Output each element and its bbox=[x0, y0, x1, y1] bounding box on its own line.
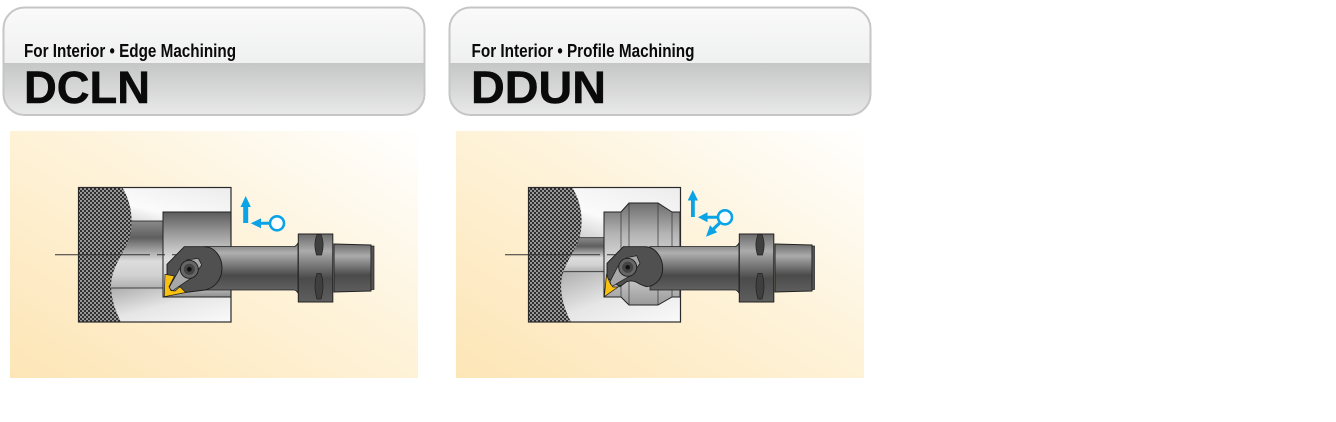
diagram: DCLN boring tool in workpiece bbox=[55, 187, 374, 322]
flange slot lower bbox=[315, 274, 323, 299]
groove lines bbox=[621, 203, 672, 305]
icon: feed direction arrows bbox=[688, 190, 732, 237]
workpiece outline bbox=[78, 188, 231, 322]
header: DDUN bbox=[450, 8, 870, 115]
center line bbox=[55, 254, 178, 256]
lower cavity bbox=[550, 271, 681, 322]
profile groove bbox=[604, 203, 680, 305]
subtitle: For Interior Edge Machining: For Interior • Edge Machining bbox=[24, 41, 236, 61]
taper shank bbox=[334, 244, 371, 292]
clamp bbox=[169, 258, 202, 291]
flange bbox=[739, 234, 774, 302]
workpiece bbox=[78, 187, 132, 322]
diagram: DDUN boring tool in workpiece bbox=[505, 187, 814, 322]
flange slot upper bbox=[756, 234, 764, 255]
carbide insert bbox=[164, 274, 186, 297]
tool head bbox=[607, 247, 663, 287]
flange slot upper bbox=[315, 234, 323, 255]
shank end bbox=[812, 246, 814, 290]
bore bbox=[110, 221, 166, 288]
model name: DCLN: DCLN bbox=[24, 62, 150, 113]
clamp bbox=[610, 256, 640, 287]
screw bbox=[619, 258, 637, 276]
tool shank bar bbox=[205, 243, 298, 293]
shank end bbox=[371, 246, 374, 290]
background panel: DCLN diagram bbox=[10, 131, 418, 378]
flange slot lower bbox=[756, 274, 764, 299]
flange bbox=[298, 234, 333, 302]
screw bbox=[180, 260, 198, 278]
workpiece outline bbox=[528, 188, 680, 322]
upper cavity bbox=[78, 187, 231, 227]
sleeve bore bbox=[163, 212, 231, 297]
workpiece bbox=[528, 187, 582, 322]
upper cavity bbox=[528, 187, 681, 238]
lower cavity bbox=[100, 288, 231, 322]
tool shank bar bbox=[650, 243, 739, 293]
panel: DCLN bbox=[4, 8, 424, 378]
icon: feed direction arrows bbox=[240, 196, 284, 230]
taper shank bbox=[775, 244, 812, 292]
bore bbox=[560, 238, 606, 272]
panel: DDUN bbox=[450, 8, 870, 378]
model name: DDUN: DDUN bbox=[471, 62, 606, 113]
center line bbox=[505, 254, 622, 256]
tool head bbox=[167, 247, 222, 292]
background panel: DDUN diagram bbox=[456, 131, 864, 378]
carbide insert bbox=[604, 275, 621, 297]
subtitle: For Interior Profile Machining: For Interior • Profile Machining bbox=[472, 41, 694, 61]
header: DCLN bbox=[4, 8, 424, 115]
